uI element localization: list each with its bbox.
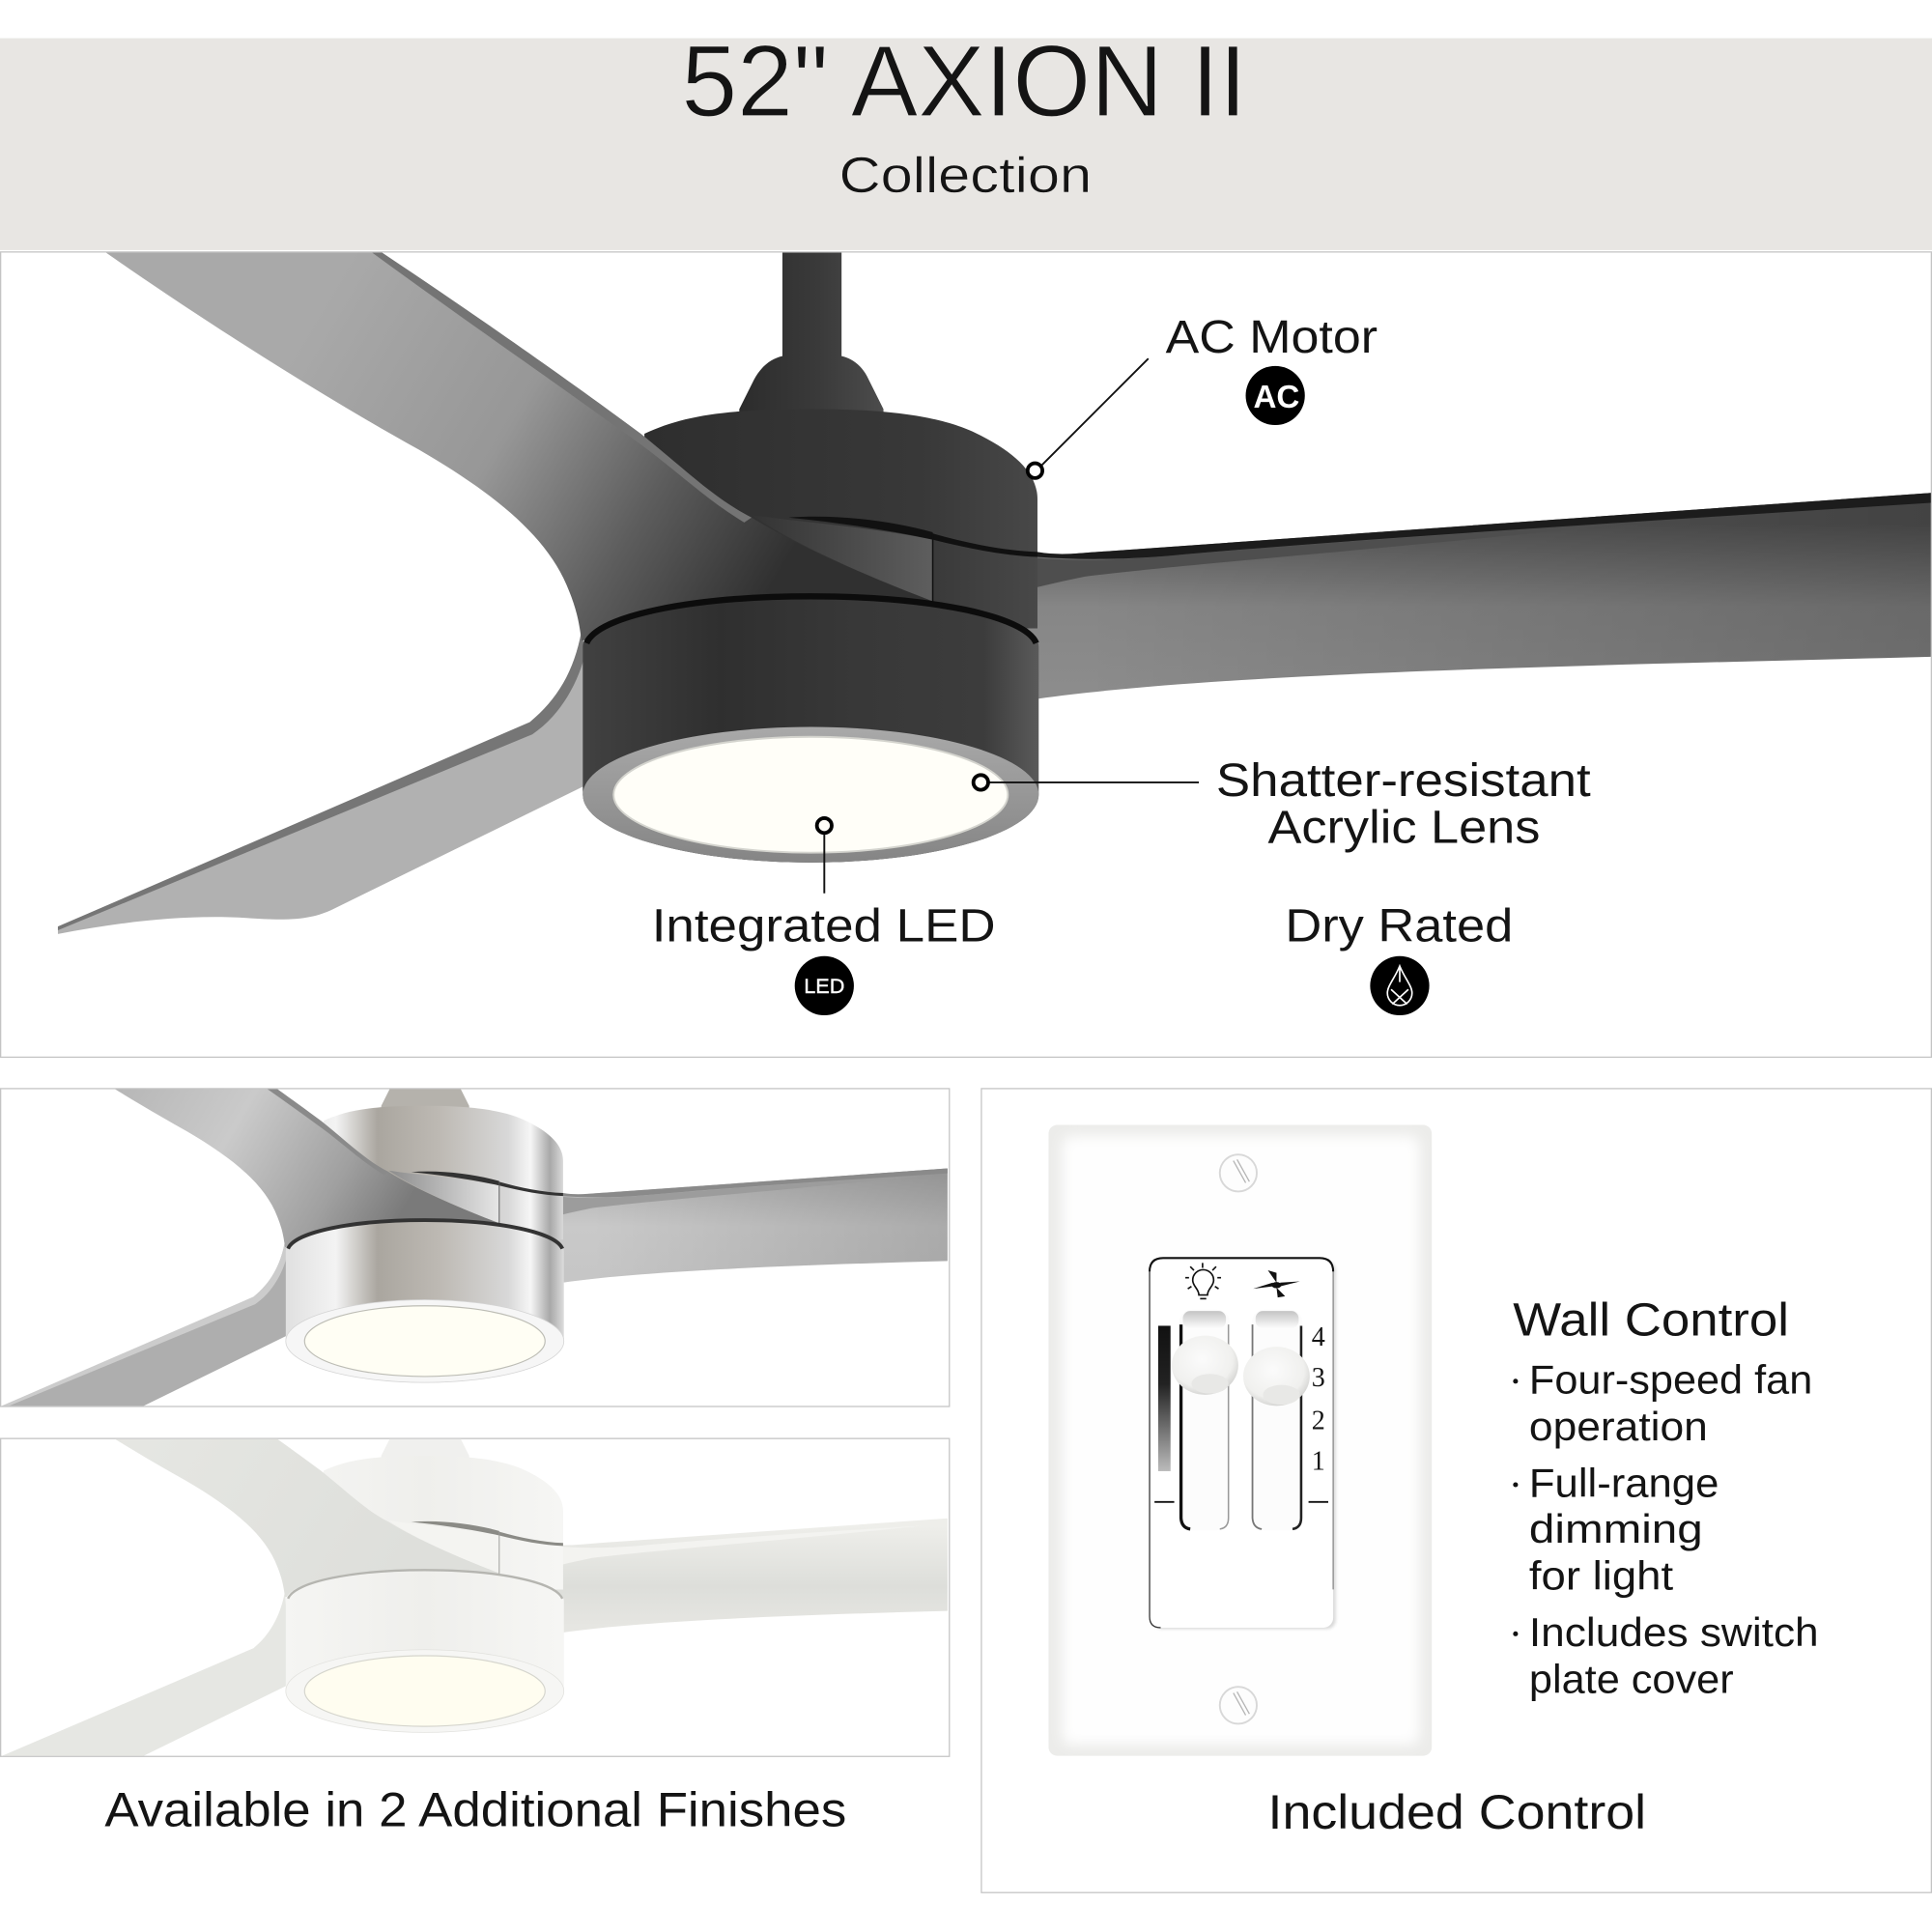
callout: AC Motor: AC (1253, 380, 1299, 415)
icon: light bulb (1185, 1263, 1221, 1298)
dimmer scale (1158, 1325, 1171, 1471)
heading: wall control: Wall Control (1513, 1294, 1789, 1347)
callout: AC Motor (1028, 311, 1378, 478)
bullet: full-range dimming: for light (1529, 1552, 1673, 1598)
slider: light (1172, 1310, 1238, 1530)
fan speed numbers: 4 (1312, 1322, 1325, 1352)
panel: included control (981, 1089, 1931, 1892)
bullet: four-speed fan: operation (1529, 1404, 1708, 1449)
tick marks (1154, 1501, 1328, 1503)
slider: fan (1243, 1310, 1310, 1530)
bullet: switch plate cover: plate cover (1529, 1657, 1734, 1702)
fan speed numbers: 1 (1312, 1447, 1325, 1477)
icon: fan (1253, 1270, 1300, 1297)
callout: Shatter-resistant Acrylic Lens (974, 754, 1591, 853)
bullet: full-range dimming: dimming (1529, 1506, 1703, 1551)
icon: bottom screw (1220, 1687, 1257, 1723)
header band (0, 25, 1932, 250)
callout: Integrated LED: LED (804, 974, 844, 998)
bullet: switch plate cover (1513, 1609, 1819, 1702)
caption: included control: Included Control (1267, 1785, 1646, 1839)
bullet: four-speed fan (1513, 1357, 1812, 1449)
slider faceplate (1150, 1258, 1336, 1629)
fan speed numbers: 2 (1312, 1406, 1325, 1436)
callout: Dry Rated: Dry Rated (1285, 899, 1513, 952)
illustration: white fan (3, 1439, 948, 1756)
panel: brushed nickel finish (0, 1088, 951, 1407)
illustration: matte black ceiling fan (58, 185, 1932, 934)
panel: white finish (0, 1437, 951, 1757)
icon: top screw (1220, 1154, 1257, 1191)
callout: Integrated LED (652, 818, 996, 1015)
bullet: full-range dimming (1513, 1461, 1719, 1598)
fan speed numbers: 3 (1312, 1363, 1325, 1393)
caption: additional finishes: Available in 2 Additional Finishes (104, 1782, 846, 1836)
subtitle: Collection (839, 148, 1092, 204)
callout: Dry Rated (1285, 899, 1513, 1015)
illustration: brushed nickel fan (2, 1090, 948, 1406)
callout: AC Motor: AC Motor (1166, 311, 1378, 363)
bullet: switch plate cover: Includes switch (1529, 1609, 1819, 1655)
illustration: wall control plate (1048, 1125, 1432, 1756)
panel: main fan features (1, 185, 1932, 1057)
fan speed numbers (1312, 1322, 1325, 1477)
callout: Integrated LED: Integrated LED (652, 899, 996, 952)
callout: Shatter-resistant Acrylic Lens: Shatter-resistant (1216, 754, 1591, 807)
callout: Shatter-resistant Acrylic Lens: Acrylic Lens (1267, 801, 1540, 853)
bullet: four-speed fan: Four-speed fan (1529, 1357, 1812, 1403)
bullet: full-range dimming: Full-range (1529, 1461, 1719, 1506)
title: 52" AXION II (681, 25, 1247, 138)
